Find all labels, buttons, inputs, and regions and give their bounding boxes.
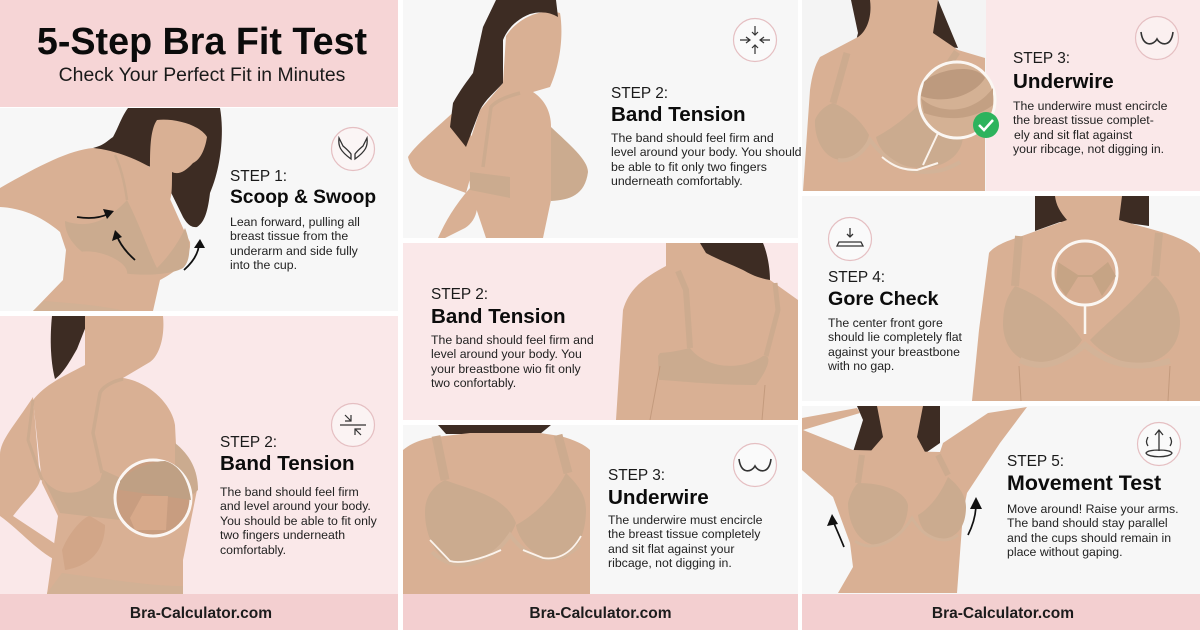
figure: front view with magnifier <box>802 0 999 191</box>
icon: hands <box>330 126 376 172</box>
step 2 text: level around your body. You should <box>611 145 802 159</box>
step 1 text: underarm and side fully <box>230 244 358 258</box>
step 3 text: the breast tissue complet- <box>1013 113 1154 127</box>
step 4 text: should lie completely flat <box>828 330 962 344</box>
step 3 text: ribcage, not digging in. <box>608 556 732 570</box>
step 4 text: with no gap. <box>828 359 894 373</box>
step 3 text: ely and sit flat against <box>1014 128 1132 142</box>
footer: middle <box>403 594 798 630</box>
panel: step 2 band tension, centre <box>403 243 798 420</box>
icon: green check <box>973 112 999 138</box>
icon: band tension <box>331 402 375 447</box>
header panel <box>0 0 398 107</box>
step 5 text: Movement Test <box>1007 471 1161 495</box>
step 2 text <box>220 434 377 557</box>
icon: underwire <box>1135 16 1179 60</box>
step 3 text: The underwire must encircle <box>608 513 762 527</box>
icon: flat gore <box>828 216 872 262</box>
step 2 text: Band Tension <box>431 305 566 328</box>
step 5 text: The band should stay parallel <box>1007 516 1168 530</box>
step 3 text: The underwire must encircle <box>1013 99 1167 113</box>
step 3 text: the breast tissue completely <box>608 527 760 541</box>
step 1 text: breast tissue from the <box>230 229 348 243</box>
step 5 text: STEP 5: <box>1007 453 1064 470</box>
step 1 text: Lean forward, pulling all <box>230 215 360 229</box>
step 4 text: against your breastbone <box>828 345 960 359</box>
footer: right: Bra-Calculator.com <box>932 605 1074 622</box>
icon: underwire <box>732 442 778 488</box>
figure: front view with gore magnifier <box>972 196 1200 401</box>
step 2 text: be able to fit only two fingers <box>611 160 767 174</box>
step 5 text: and the cups should remain in <box>1007 531 1171 545</box>
step 1 text <box>230 168 376 272</box>
panel: step 5 movement test <box>802 406 1200 594</box>
step 1 text: STEP 1: <box>230 168 287 185</box>
panel: step 3 underwire, top right <box>802 0 1200 191</box>
step 4 text <box>828 269 962 373</box>
figure: back view with magnifier <box>0 316 198 594</box>
figure: arms raised <box>802 406 1027 593</box>
step 2 text: two fingers underneath <box>220 528 345 542</box>
step 2 text: and level around your body. <box>220 499 371 513</box>
step 2 text: The band should feel firm and <box>611 131 774 145</box>
step 5 text: place without gaping. <box>1007 545 1123 559</box>
step 1 text: into the cup. <box>230 258 297 272</box>
step 2 text: Band Tension <box>220 452 355 475</box>
footer: middle: Bra-Calculator.com <box>529 605 672 622</box>
step 2 text: underneath comfortably. <box>611 174 743 188</box>
icon: compression <box>732 18 778 62</box>
panel: step 4 gore check <box>802 196 1200 401</box>
step 4 text: STEP 4: <box>828 269 885 286</box>
step 3 text <box>1013 50 1167 156</box>
subtitle: Check Your Perfect Fit in Minutes <box>59 64 345 86</box>
step 4 text: The center front gore <box>828 316 943 330</box>
figure: leaning forward <box>0 108 222 311</box>
step 3 text: STEP 3: <box>1013 50 1070 67</box>
step 1 text: Scoop & Swoop <box>230 187 376 208</box>
footer: left <box>0 594 398 630</box>
figure: side back view <box>408 0 588 238</box>
footer: right <box>802 594 1200 630</box>
step 3 text: STEP 3: <box>608 467 665 484</box>
step 4 text: Gore Check <box>828 288 939 310</box>
step 3 text: your ribcage, not digging in. <box>1013 142 1164 156</box>
panel: step 1 scoop and swoop <box>0 108 398 311</box>
step 3 text: Underwire <box>1013 70 1114 93</box>
step 2 text <box>431 286 594 390</box>
step 2 text: two confortably. <box>431 376 516 390</box>
step 2 text: STEP 2: <box>431 286 488 303</box>
step 5 text <box>1007 453 1179 559</box>
step 3 text: Underwire <box>608 486 709 509</box>
footer: left: Bra-Calculator.com <box>130 605 272 622</box>
step 2 text: The band should feel firm <box>220 485 359 499</box>
step 5 text: Move around! Raise your arms. <box>1007 502 1179 516</box>
panel: step 2 band tension, top middle <box>403 0 798 238</box>
title: 5-Step Bra Fit Test <box>37 20 367 62</box>
step 3 text <box>608 467 762 570</box>
step 2 text <box>611 85 802 188</box>
figure: back view <box>616 243 798 420</box>
step 2 text: your breastbone wio fit only <box>431 362 581 376</box>
figure: front view <box>403 425 590 594</box>
step 2 text: Band Tension <box>611 103 746 126</box>
step 2 text: comfortably. <box>220 543 286 557</box>
step 2 text: The band should feel firm and <box>431 333 594 347</box>
step 2 text: level around your body. You <box>431 347 582 361</box>
panel: step 2 band tension, left <box>0 316 398 594</box>
panel: step 3 underwire, middle <box>403 425 798 594</box>
icon: movement <box>1136 422 1182 466</box>
step 2 text: STEP 2: <box>220 434 277 451</box>
step 2 text: STEP 2: <box>611 85 668 102</box>
step 3 text: and sit flat against your <box>608 542 734 556</box>
step 2 text: You should be able to fit only <box>220 514 377 528</box>
